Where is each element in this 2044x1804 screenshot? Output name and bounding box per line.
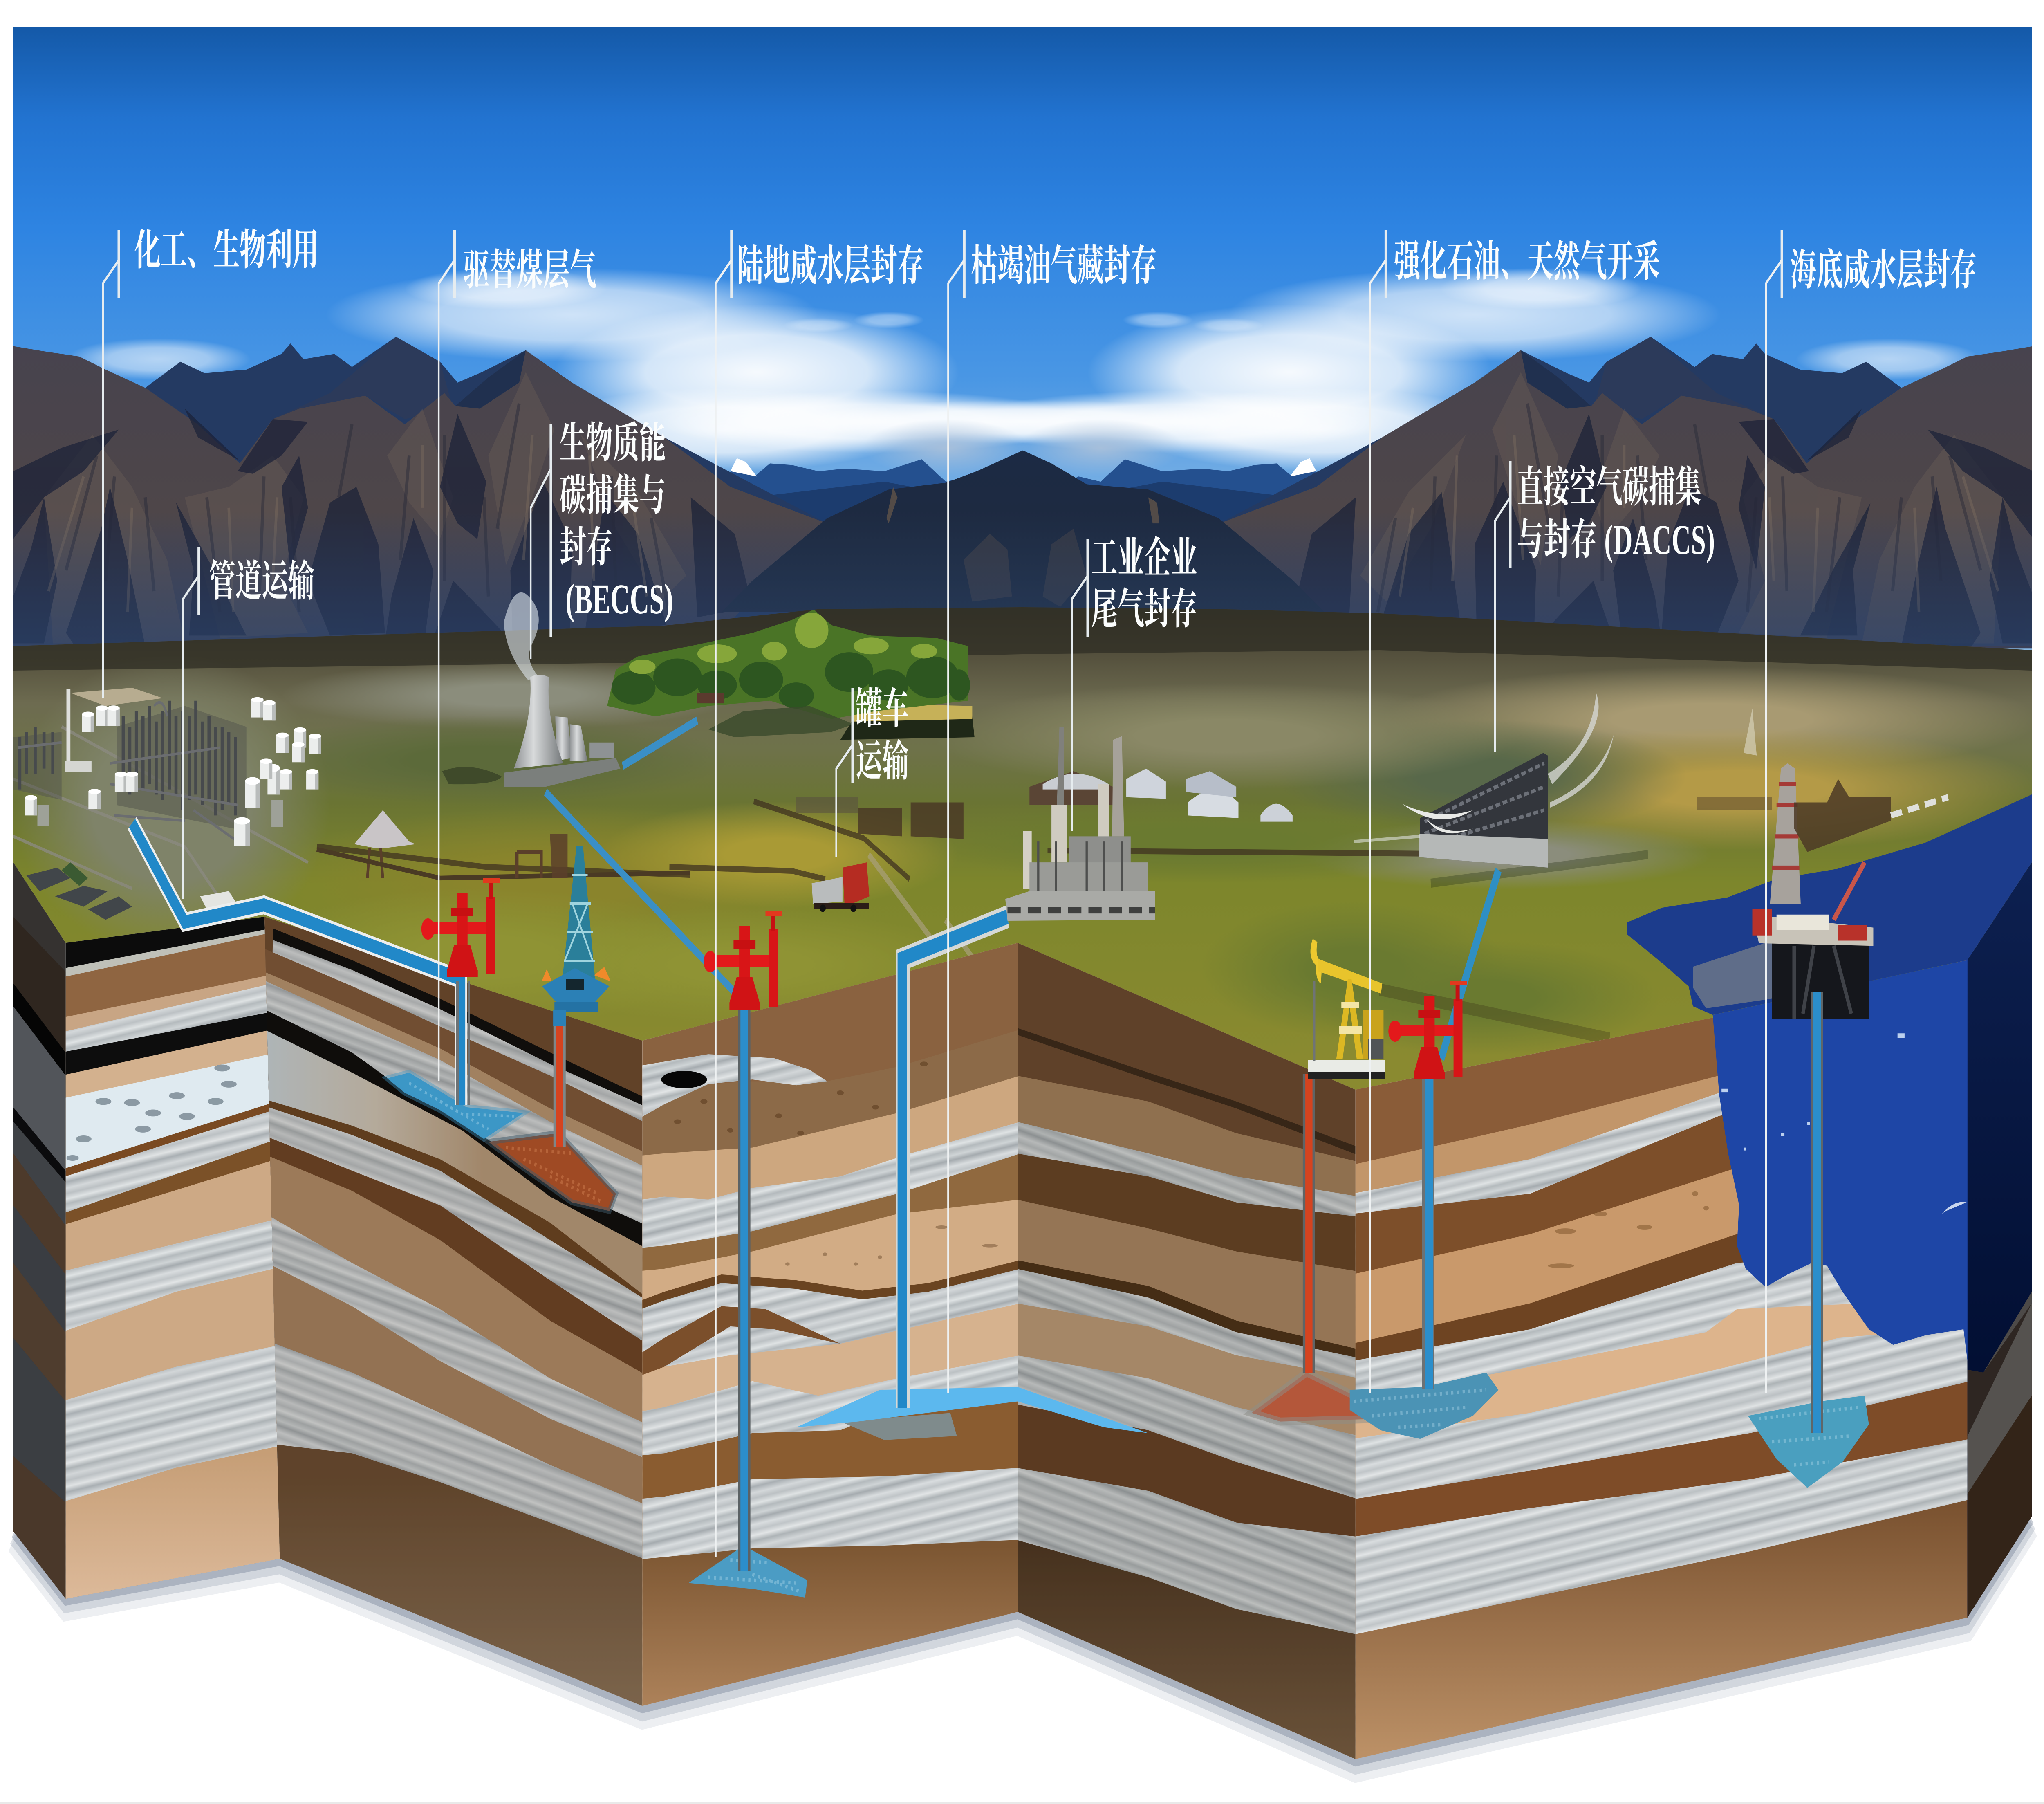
- mountains left and right: [13, 337, 2033, 648]
- front face 4 strata: [1012, 900, 1364, 1776]
- injection well: subsea aquifer: [1811, 992, 1823, 1433]
- yurts and settlement: [796, 769, 1293, 839]
- power plant with cooling towers: [442, 592, 621, 787]
- callout: DACCS: 直接空气碳捕集: [1517, 464, 1701, 511]
- callout: pipeline transport: [183, 547, 314, 899]
- refinery complex: [13, 688, 321, 920]
- callout: industrial flue gas storage: 工业企业: [1091, 535, 1197, 582]
- callout: tanker transport: 罐车: [856, 686, 909, 733]
- callout: tanker transport: 运输: [856, 738, 909, 785]
- sea water cross-section: [1713, 960, 1968, 1361]
- front face 1 strata: [62, 900, 286, 1649]
- callout: subsea saline aquifer storage: 海底咸水层封存: [1790, 247, 1977, 294]
- callout: DACCS: [1495, 461, 1715, 752]
- callout: BECCS: [531, 420, 673, 659]
- CO2 pipeline from refinery: [132, 823, 461, 1105]
- clouds: [66, 268, 1981, 471]
- callout: DACCS: 与封存 (DACCS): [1517, 516, 1715, 563]
- direct air capture facility: [1354, 693, 1614, 868]
- offshore drilling platform: [1693, 763, 1873, 1019]
- front face 5 strata: [1352, 957, 1972, 1776]
- injection well: land aquifer: [738, 1009, 751, 1571]
- injection well: enhanced recovery: [1422, 1079, 1434, 1389]
- storage plume: land aquifer: [688, 1546, 807, 1598]
- callout: pipeline transport: 管道运输: [209, 558, 314, 605]
- wellhead: land aquifer: [704, 911, 782, 1010]
- callout: chemical and biological utilization: 化工、生物利用: [134, 227, 319, 274]
- storage plume: enhanced gas recovery: [1350, 1373, 1499, 1439]
- callout: onshore saline aquifer storage: [716, 230, 924, 1557]
- callout: BECCS: (BECCS): [565, 576, 673, 623]
- callout: BECCS: 碳捕集与: [560, 472, 666, 519]
- callout: depleted oil and gas reservoir storage: [948, 230, 1157, 1393]
- ground surface: [13, 607, 2032, 1090]
- callout: industrial flue gas storage: 尾气封存: [1091, 586, 1197, 633]
- blue drilling rig with platform: [542, 846, 611, 1026]
- sea surface: [1627, 794, 2032, 1015]
- injection well: coal seam: [456, 981, 470, 1105]
- tree island: [607, 610, 975, 740]
- land-side settlement by the sea: [1697, 709, 1948, 852]
- pipeline from bioenergy plant to well: [545, 792, 737, 995]
- pipeline from air capture: [1441, 870, 1499, 1059]
- refinery ground haze: [13, 654, 330, 956]
- right side face: [1965, 859, 2034, 1623]
- small yurt and water tower: [317, 810, 690, 878]
- callout: BECCS: 封存: [560, 524, 613, 571]
- storage plume: subsea aquifer: [1748, 1396, 1869, 1488]
- front face 3 strata: [634, 900, 1025, 1719]
- callout: coalbed methane displacement: [439, 230, 596, 1081]
- oil pumpjack: [1308, 939, 1385, 1079]
- pipeline from bioenergy plant to trees: [623, 720, 697, 766]
- callout: enhanced oil and gas recovery: [1370, 230, 1660, 1393]
- pipeline from industrial plant: [902, 917, 1007, 1408]
- callout: enhanced oil and gas recovery: 强化石油、天然气开采: [1394, 238, 1660, 285]
- callout: chemical and biological utilization: [103, 227, 319, 698]
- callout: BECCS: 生物质能: [560, 420, 666, 467]
- storage plume: displaced oil/gas: [489, 1133, 616, 1211]
- storage plume: enhanced oil recovery: [1252, 1373, 1386, 1422]
- callout: depleted oil and gas reservoir storage: 枯竭油气藏封存: [971, 242, 1157, 289]
- wellhead: coal seam: [421, 878, 500, 977]
- left side face strata: [9, 853, 70, 1661]
- oil tanker truck: [812, 862, 870, 912]
- callout: onshore saline aquifer storage: 陆地咸水层封存: [737, 242, 924, 289]
- distant blue mountains: [730, 422, 1316, 522]
- production well: displaced methane: [554, 1010, 566, 1147]
- wellhead: enhanced recovery: [1388, 981, 1467, 1079]
- storage plume: depleted reservoir: [796, 1387, 1148, 1440]
- production well: enhanced recovery: [1303, 1074, 1315, 1373]
- fence lines: [317, 801, 1533, 879]
- callout: subsea saline aquifer storage: [1766, 230, 1977, 1393]
- central dark mountain: [722, 451, 1324, 612]
- horizon tree band: [13, 607, 2032, 671]
- storage plume: coal seam CO2: [387, 1073, 524, 1139]
- geological block shadow: [13, 1520, 2032, 1770]
- front face 2 strata: [256, 900, 656, 1719]
- callout: tanker transport: [836, 686, 909, 857]
- callout: coalbed methane displacement: 驱替煤层气: [463, 247, 596, 294]
- industrial plant: [1005, 727, 1155, 921]
- callout: industrial flue gas storage: [1072, 535, 1197, 831]
- sky background: [13, 27, 2032, 722]
- mountain base haze: [13, 511, 2032, 646]
